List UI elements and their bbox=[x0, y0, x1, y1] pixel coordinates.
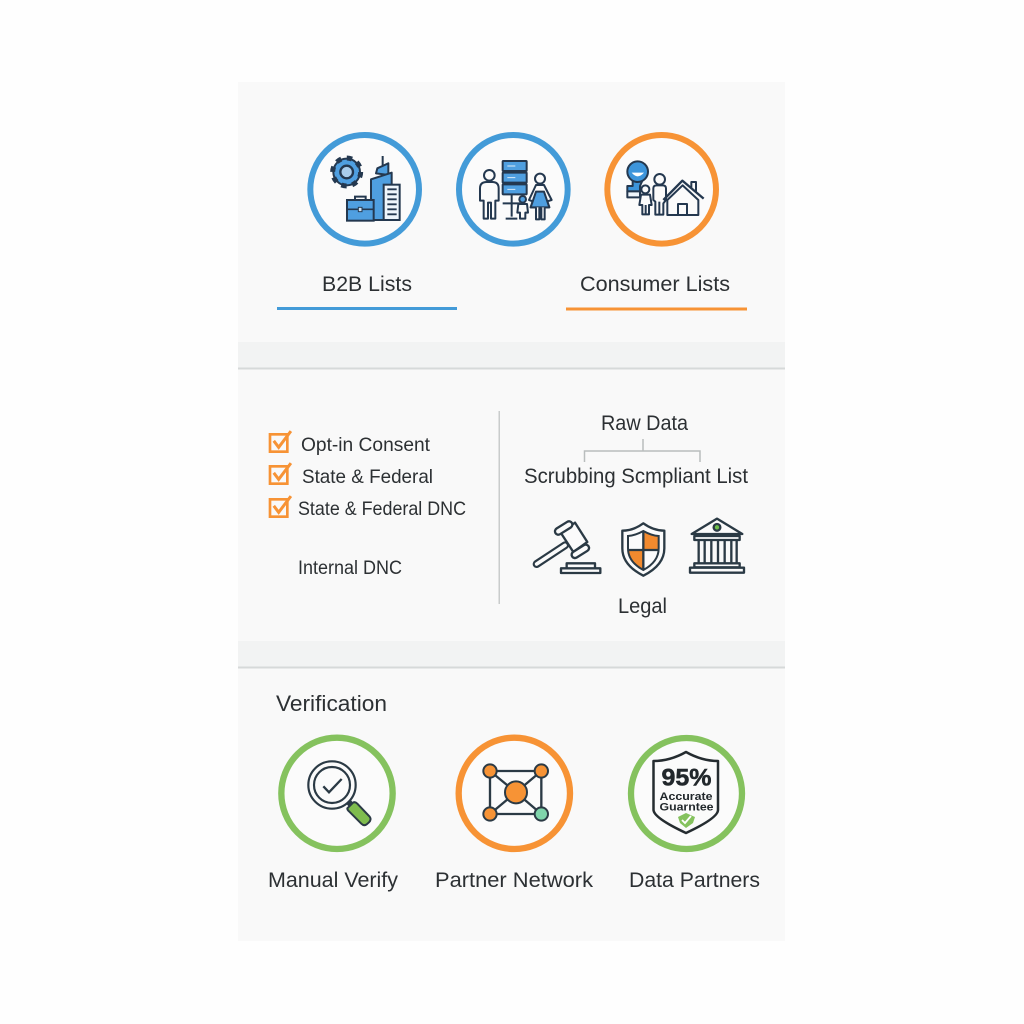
icon: people and data servers bbox=[459, 135, 568, 244]
panel: scrubbing and legal bbox=[524, 412, 748, 618]
icon: government building bbox=[690, 519, 744, 573]
text: Internal DNC: Internal DNC bbox=[298, 558, 402, 579]
text: Partner Network: Partner Network bbox=[435, 869, 594, 892]
icon: checkbox 3 bbox=[270, 497, 290, 517]
divider: compliance columns bbox=[498, 411, 500, 604]
icon: consumer family and house bbox=[607, 135, 716, 244]
icon: checkbox 1 bbox=[270, 432, 290, 452]
text: Legal: Legal bbox=[618, 595, 667, 618]
icon: 95% guarantee shield: 95% bbox=[662, 764, 712, 792]
icon: B2B gear, buildings and briefcase bbox=[310, 135, 419, 244]
heading: Consumer Lists: Consumer Lists bbox=[580, 273, 730, 296]
icon: 95% guarantee shield: Accurate bbox=[660, 791, 712, 803]
icon: partner network bbox=[459, 738, 570, 849]
icon: gavel bbox=[537, 520, 600, 573]
panel: background card bbox=[238, 82, 785, 941]
icon: magnifier check bbox=[281, 738, 393, 849]
icon: 95% guarantee shield: Guarntee bbox=[660, 802, 714, 814]
heading: B2B Lists: B2B Lists bbox=[322, 273, 412, 296]
panel: verification bbox=[268, 691, 760, 892]
heading: Verification: Verification bbox=[276, 691, 387, 716]
text: Scrubbing Scmpliant List: Scrubbing Scmpliant List bbox=[524, 465, 748, 488]
icon: 95% guarantee shield bbox=[631, 738, 742, 849]
text: Opt-in Consent: Opt-in Consent bbox=[301, 434, 431, 456]
underline: Consumer Lists bbox=[566, 308, 747, 310]
text: Data Partners: Data Partners bbox=[629, 869, 760, 892]
text: Raw Data: Raw Data bbox=[601, 412, 688, 435]
underline: B2B Lists bbox=[277, 307, 457, 310]
panel: list types bbox=[277, 135, 747, 310]
text: State & Federal DNC: State & Federal DNC bbox=[298, 498, 466, 520]
icon: shield bbox=[622, 523, 664, 576]
panel: compliance checklist bbox=[270, 432, 466, 579]
text: State & Federal: State & Federal bbox=[302, 466, 433, 488]
text: Manual Verify: Manual Verify bbox=[268, 869, 399, 892]
icon: checkbox 2 bbox=[270, 464, 290, 484]
connector: bracket bbox=[584, 439, 700, 462]
